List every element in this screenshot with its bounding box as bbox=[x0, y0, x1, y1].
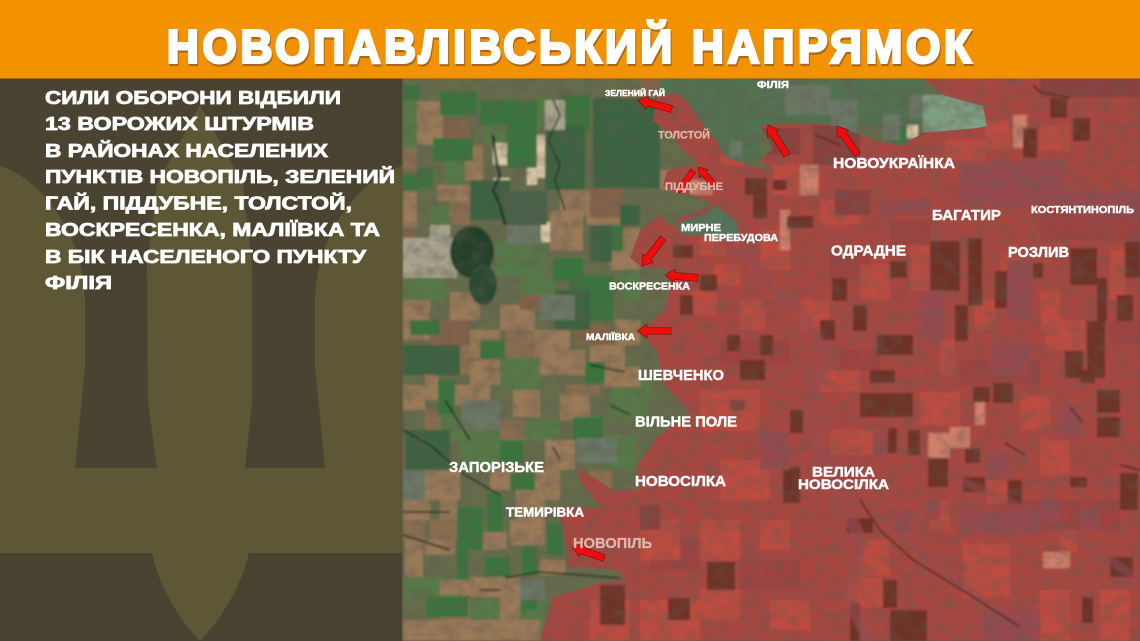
text block: defence summary: В БІК НАСЕЛЕНОГО ПУНКТУ bbox=[45, 247, 367, 267]
arrow: Піддубне east bbox=[694, 163, 719, 190]
text block: defence summary: ПУНКТІВ НОВОПІЛЬ, ЗЕЛЕНИЙ bbox=[45, 166, 395, 187]
text block: defence summary: ГАЙ, ПІДДУБНЕ, ТОЛСТОЙ, bbox=[45, 192, 352, 214]
text block: defence summary bbox=[45, 88, 395, 293]
label: Мирне: МИРНЕ bbox=[681, 222, 721, 234]
map: occupied red zone bbox=[540, 78, 1140, 641]
arrow: Воскресенка east bbox=[664, 268, 698, 285]
map: satellite base with fields bbox=[402, 78, 1140, 641]
label: Темирівка: ТЕМИРІВКА bbox=[506, 506, 584, 520]
text block: defence summary: ВОСКРЕСЕНКА, МАЛІЇВКА ТА bbox=[45, 220, 380, 240]
text block: defence summary: СИЛИ ОБОРОНИ ВІДБИЛИ bbox=[45, 88, 341, 108]
label: Велика Новосілка: ВЕЛИКА bbox=[812, 464, 875, 480]
map: satellite texture bbox=[402, 78, 1140, 641]
text block: defence summary: 13 ВОРОЖИХ ШТУРМІВ bbox=[45, 114, 314, 134]
map: green pocket near Мирне bbox=[675, 205, 740, 241]
label: Філія: ФІЛІЯ bbox=[757, 80, 789, 91]
label: Новосілка: НОВОСІЛКА bbox=[635, 474, 727, 490]
label: Велика Новосілка bbox=[798, 464, 889, 492]
label: Новопіль: НОВОПІЛЬ bbox=[573, 536, 652, 552]
label: Піддубне: ПІДДУБНЕ bbox=[665, 181, 723, 193]
label: Толстой: ТОЛСТОЙ bbox=[658, 128, 710, 142]
arrow: Філія bbox=[762, 121, 793, 159]
label: Перебудова: ПЕРЕБУДОВА bbox=[704, 233, 778, 244]
title: НОВОПАВЛІВСЬКИЙ НАПРЯМОК bbox=[167, 19, 971, 73]
label: Розлив: РОЗЛИВ bbox=[1008, 245, 1069, 261]
label: Одрадне: ОДРАДНЕ bbox=[831, 244, 906, 260]
text block: defence summary: В РАЙОНАХ НАСЕЛЕНИХ bbox=[45, 140, 328, 161]
arrow: Новоукраїнка bbox=[831, 122, 863, 158]
label: Багатир: БАГАТИР bbox=[932, 208, 1001, 224]
arrow: Воскресенка north bbox=[636, 234, 669, 270]
label: Вільне Поле: ВІЛЬНЕ ПОЛЕ bbox=[635, 414, 737, 430]
arrow: Новопіль bbox=[570, 540, 606, 565]
label: Запорізьке: ЗАПОРІЗЬКЕ bbox=[449, 460, 544, 476]
icon: trident watermark bbox=[0, 105, 402, 641]
label: Костянтинопіль: КОСТЯНТИНОПІЛЬ bbox=[1031, 205, 1134, 216]
arrow: Маліївка bbox=[637, 324, 671, 338]
arrow: Зелений Гай bbox=[636, 93, 674, 116]
label: Маліївка: МАЛІЇВКА bbox=[586, 332, 635, 343]
label: Воскресенка: ВОСКРЕСЕНКА bbox=[609, 280, 690, 292]
map labels bbox=[449, 80, 1134, 552]
arrow: Піддубне west bbox=[673, 167, 698, 196]
panel: left text panel bbox=[0, 78, 402, 641]
label: Шевченко: ШЕВЧЕНКО bbox=[638, 368, 724, 384]
label: Новоукраїнка: НОВОУКРАЇНКА bbox=[833, 155, 956, 172]
label: Велика Новосілка: НОВОСІЛКА bbox=[798, 477, 889, 492]
text block: defence summary: ФІЛІЯ bbox=[45, 273, 112, 293]
header bar bbox=[0, 0, 1140, 78]
label: Зелений Гай: ЗЕЛЕНИЙ ГАЙ bbox=[605, 87, 665, 98]
